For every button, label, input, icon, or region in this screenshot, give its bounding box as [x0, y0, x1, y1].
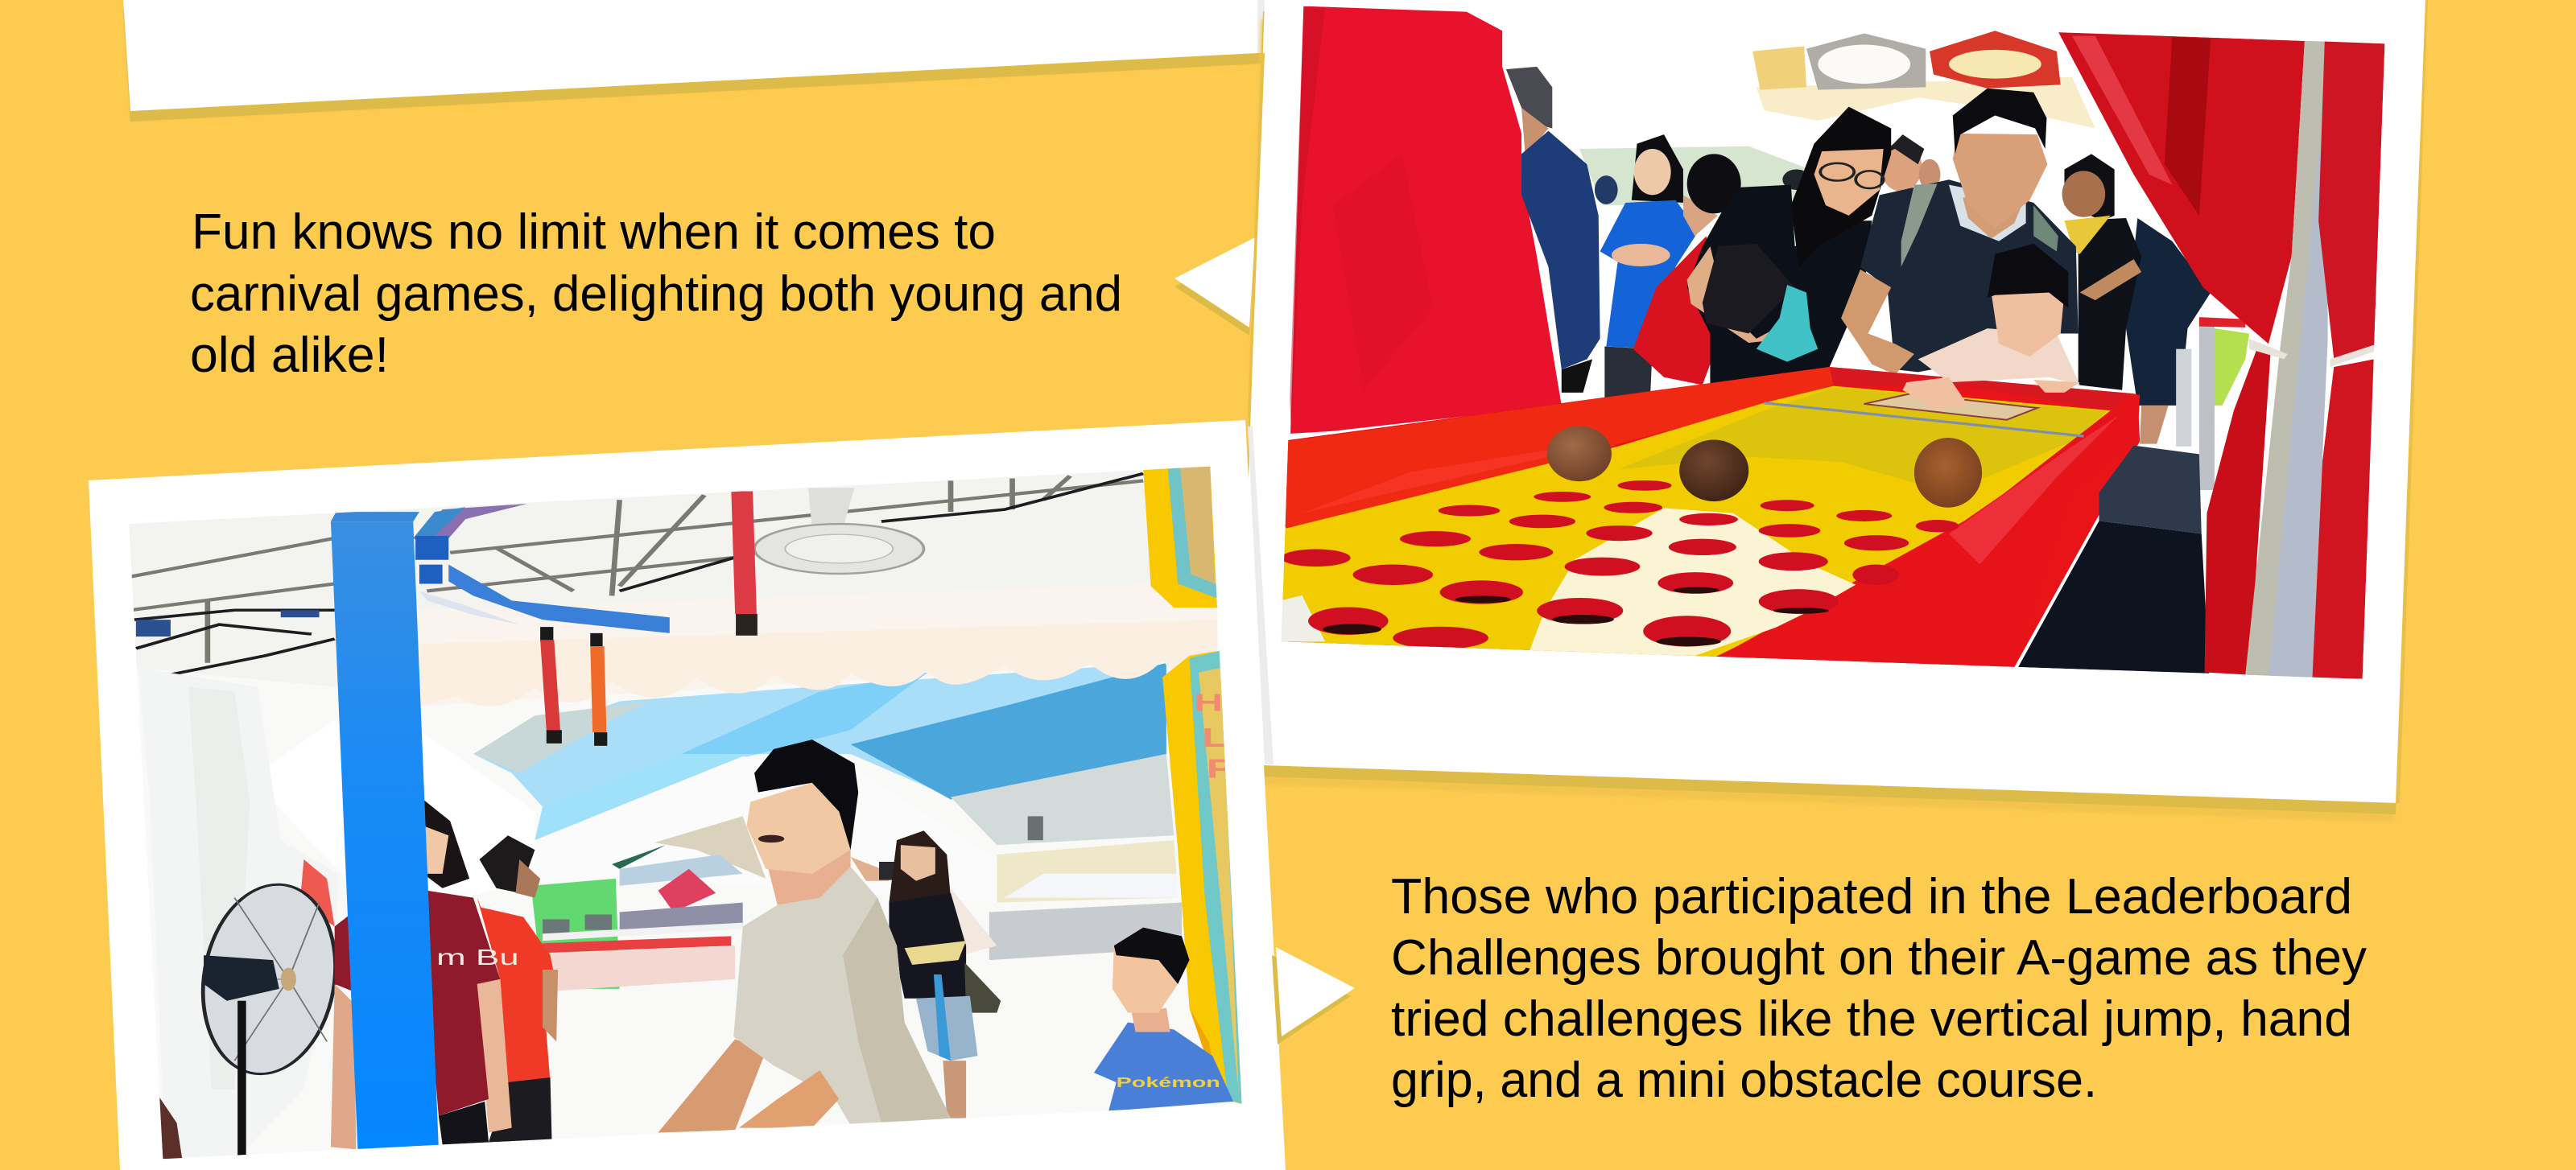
awning — [419, 620, 1217, 707]
roof and truss — [126, 467, 1217, 706]
panel: left polaroid photo card — [80, 418, 1355, 1170]
red curtain — [2058, 32, 2384, 679]
person in red shirt — [477, 835, 558, 1142]
woman in maroon shirt — [331, 800, 519, 1149]
background booths and fence — [531, 869, 1182, 991]
colourful game signs: Hl — [1194, 688, 1234, 716]
panel: top white card — [123, 0, 1265, 122]
caption: leaderboard challenges — [1391, 869, 2367, 1108]
tents and curtain — [168, 673, 997, 1090]
colourful game signs: L — [1202, 723, 1228, 753]
man in navy polo — [1841, 89, 2079, 375]
robe of staff member — [1290, 6, 1562, 434]
boy in blue shirt — [1094, 928, 1233, 1111]
main man looking up — [658, 739, 951, 1133]
arrow: pointer to leaderboard caption — [1272, 947, 1355, 1044]
table cloth — [2018, 446, 2209, 674]
woman with glasses — [1633, 107, 1891, 390]
caption: carnival games — [190, 204, 1122, 383]
caption: carnival games: Fun knows no limit when it comes to — [192, 204, 996, 260]
woman in maroon shirt: m Bu — [436, 945, 519, 970]
caption: carnival games: old alike! — [190, 328, 389, 383]
standing fan — [159, 882, 345, 1159]
woman in background — [851, 830, 1001, 1119]
photo: family at carnival ball game — [1282, 6, 2384, 679]
blue jump post — [331, 504, 670, 1149]
rails — [2176, 349, 2191, 447]
back crowd — [1506, 67, 2211, 444]
hanging jump targets — [540, 492, 758, 746]
panel: right polaroid photo card — [1174, 0, 2428, 822]
colourful game signs — [1143, 467, 1242, 1104]
carousel — [1752, 31, 2095, 128]
ceiling fan — [754, 488, 924, 574]
game table — [1282, 367, 2140, 667]
toddler — [1903, 244, 2080, 408]
caption: leaderboard challenges: tried challenges like the vertical jump, hand — [1391, 991, 2352, 1047]
caption: leaderboard challenges: Those who participated in the Leaderboard — [1391, 869, 2352, 925]
caption: carnival games: carnival games, delighting both young and — [190, 266, 1122, 322]
stadium — [473, 663, 1178, 903]
boy in blue shirt: Pokémon — [1117, 1074, 1220, 1090]
photo: man jumping at vertical jump challenge — [129, 467, 1241, 1159]
holes — [1282, 480, 1959, 649]
caption: leaderboard challenges: Challenges brought on their A-game as they — [1391, 930, 2367, 986]
caption: leaderboard challenges: grip, and a mini obstacle course. — [1391, 1053, 2097, 1108]
wooden balls — [1547, 426, 1982, 508]
arrow: pointer to carnival caption — [1174, 237, 1255, 336]
colourful game signs: F — [1207, 755, 1232, 784]
